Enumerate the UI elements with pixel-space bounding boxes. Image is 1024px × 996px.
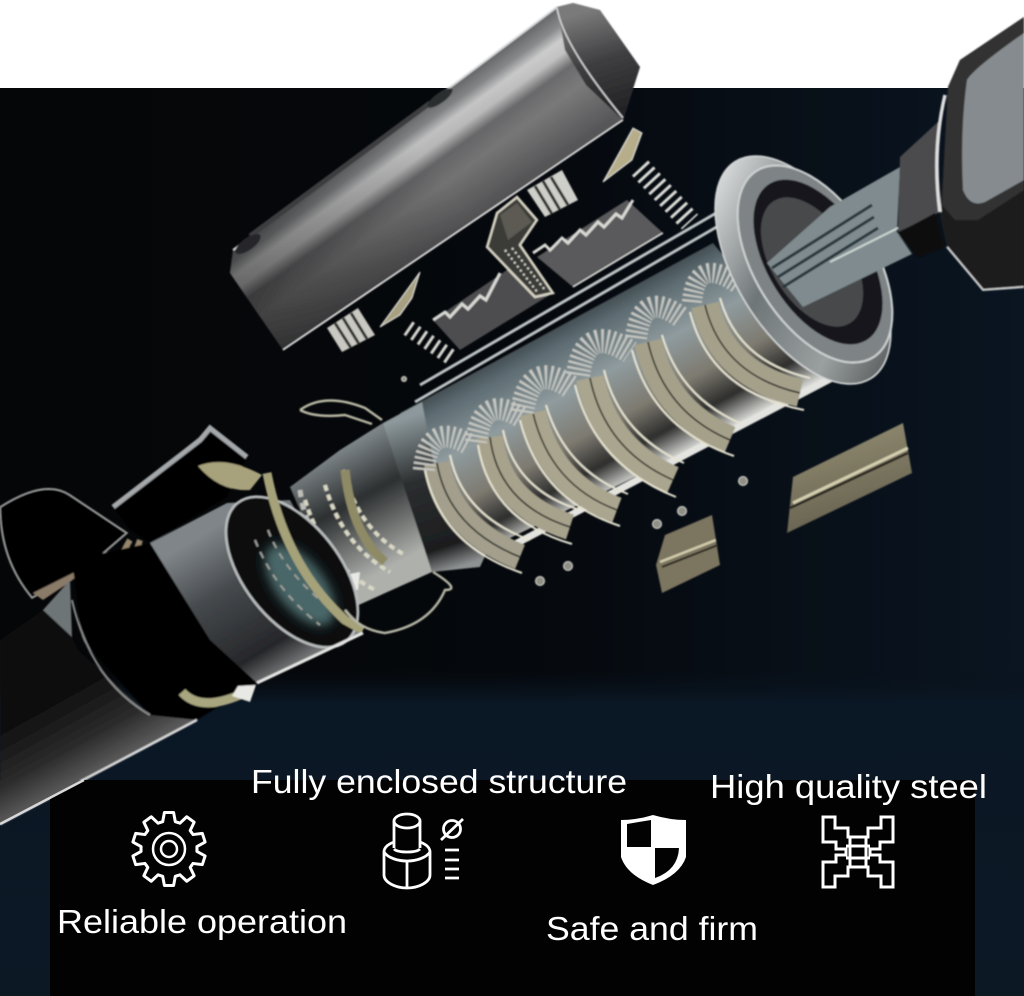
dark collar xyxy=(383,402,490,572)
gray wedge xyxy=(43,580,72,637)
icon: gear xyxy=(132,812,206,886)
label: safe and firm: Safe and firm xyxy=(546,910,758,947)
front face ring xyxy=(679,126,927,414)
lower silver barrel xyxy=(150,500,363,683)
dark tube end xyxy=(0,489,127,600)
top bracket clip xyxy=(113,428,247,543)
upper spring xyxy=(640,168,690,222)
wafer disc 6 xyxy=(690,273,810,410)
tan C clip xyxy=(116,540,140,625)
wafer disc 2 xyxy=(476,409,580,544)
main cylinder body xyxy=(400,243,827,565)
icon: steel lattice xyxy=(823,817,893,887)
feature bar panel xyxy=(50,780,975,996)
olive rim ring xyxy=(267,473,363,630)
barrel bright lower edge xyxy=(257,633,363,683)
lower spring xyxy=(408,328,452,358)
label: fully enclosed structure: Fully enclosed structure xyxy=(251,763,627,800)
tan bracket tab xyxy=(198,462,262,490)
key blade xyxy=(767,167,912,307)
wafer disc 5 xyxy=(632,307,742,456)
large loose plate xyxy=(787,423,912,533)
top cover housing xyxy=(230,3,640,350)
cylinder neck with spool xyxy=(290,423,432,612)
black lower pipe xyxy=(0,543,257,824)
lower screw xyxy=(327,308,375,352)
icon: cylinder with diameter symbol xyxy=(384,814,463,888)
label: high quality steel: High quality steel xyxy=(710,768,987,805)
cylinder top rail xyxy=(415,205,730,402)
small loose plate xyxy=(656,515,720,593)
internal slider plate right xyxy=(533,200,663,287)
key head xyxy=(898,17,1024,290)
wafer disc 4 xyxy=(575,341,684,497)
wafer disc 3 xyxy=(520,377,628,526)
cylinder bottom rail xyxy=(500,378,832,552)
loose ball bearings xyxy=(402,376,748,586)
retaining clip top xyxy=(300,400,382,424)
pipe tip over bar corner xyxy=(0,780,84,824)
locking pin right xyxy=(603,128,642,182)
locking pin left xyxy=(380,272,420,327)
label: reliable operation: Reliable operation xyxy=(57,903,347,940)
upper screw xyxy=(527,170,578,217)
wafer disc 1 xyxy=(424,437,530,573)
barrel mouth with teal interior xyxy=(200,473,384,671)
internal slider plate left xyxy=(433,270,553,350)
internal bracket xyxy=(487,197,553,297)
lower olive clip with white block xyxy=(182,685,256,703)
icon: shield xyxy=(621,815,686,885)
large snap ring xyxy=(345,572,451,633)
